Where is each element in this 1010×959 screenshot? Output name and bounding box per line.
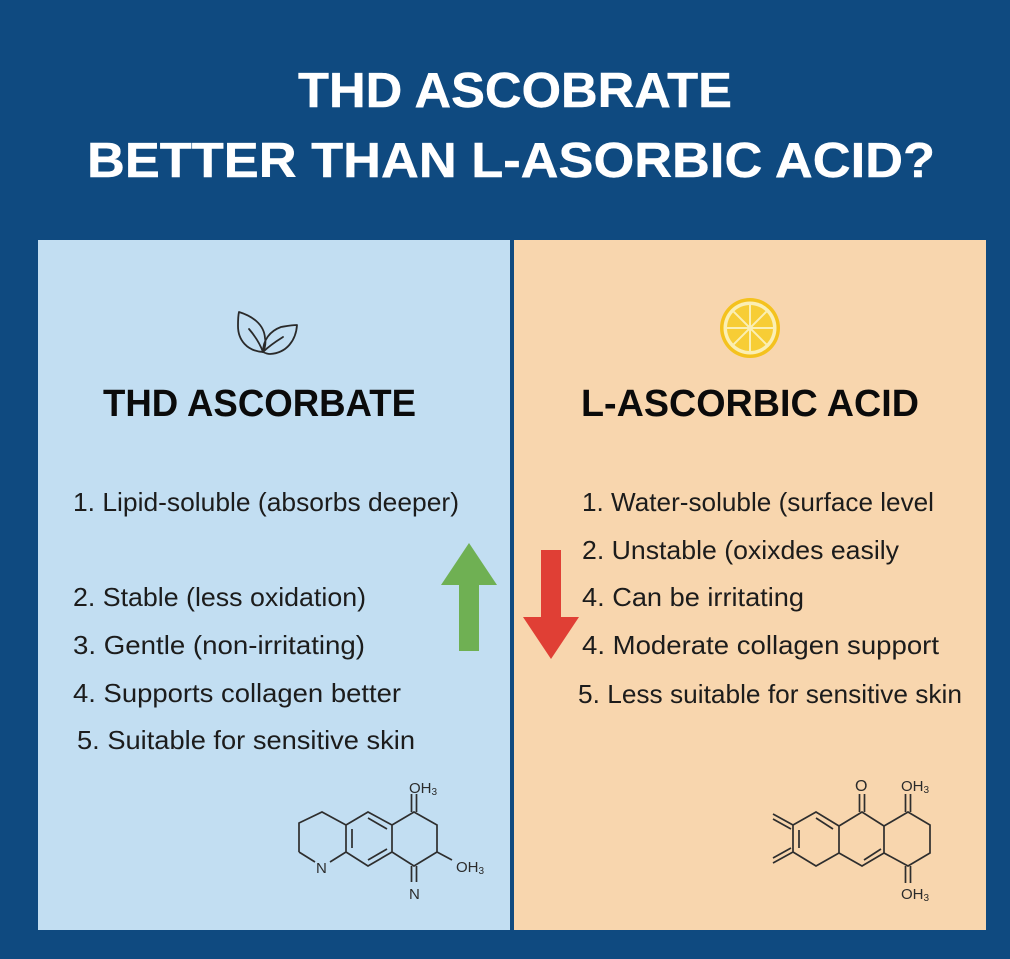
molecule diagram: left: N xyxy=(316,860,327,877)
list: 2. Unstable (oxixdes easily xyxy=(582,535,899,565)
molecule diagram: left: 3 xyxy=(478,866,484,877)
heading: THD ASCORBATE xyxy=(103,383,416,425)
molecule diagram: left: OH xyxy=(409,780,432,797)
arrow: red down xyxy=(523,550,579,659)
title: BETTER THAN L-ASORBIC ACID? xyxy=(87,134,935,188)
molecule diagram: right xyxy=(773,778,930,904)
icon: lemon slice xyxy=(720,298,780,358)
list: 4. Can be irritating xyxy=(582,582,804,612)
arrow: green up xyxy=(441,543,497,651)
icon: leaves xyxy=(238,312,297,354)
molecule diagram: left: OH xyxy=(456,859,478,876)
list: 4. Moderate collagen support xyxy=(582,630,940,660)
molecule diagram: left: 3 xyxy=(432,787,438,798)
list: 2. Stable (less oxidation) xyxy=(73,582,366,612)
molecule diagram: right: OH xyxy=(901,886,924,903)
heading: L-ASCORBIC ACID xyxy=(581,383,919,425)
panel: L-Ascorbic Acid xyxy=(514,240,986,930)
list: 1. Lipid-soluble (absorbs deeper) xyxy=(73,487,459,517)
list: 5. Suitable for sensitive skin xyxy=(77,725,415,755)
list: 4. Supports collagen better xyxy=(73,678,401,708)
list xyxy=(73,487,459,755)
list xyxy=(578,487,962,709)
molecule diagram: right: 3 xyxy=(924,785,930,796)
title: THD ASCOBRATE xyxy=(298,64,732,118)
molecule diagram: left xyxy=(299,780,484,903)
panel: THD Ascorbate xyxy=(38,240,510,930)
list: 3. Gentle (non-irritating) xyxy=(73,630,365,660)
title xyxy=(87,64,935,188)
molecule diagram: right: OH xyxy=(901,778,924,795)
list: 5. Less suitable for sensitive skin xyxy=(578,679,962,709)
molecule diagram: right: O xyxy=(855,778,867,795)
list: 1. Water-soluble (surface level xyxy=(582,487,934,517)
molecule diagram: right: 3 xyxy=(924,893,930,904)
molecule diagram: left: N xyxy=(409,886,420,903)
